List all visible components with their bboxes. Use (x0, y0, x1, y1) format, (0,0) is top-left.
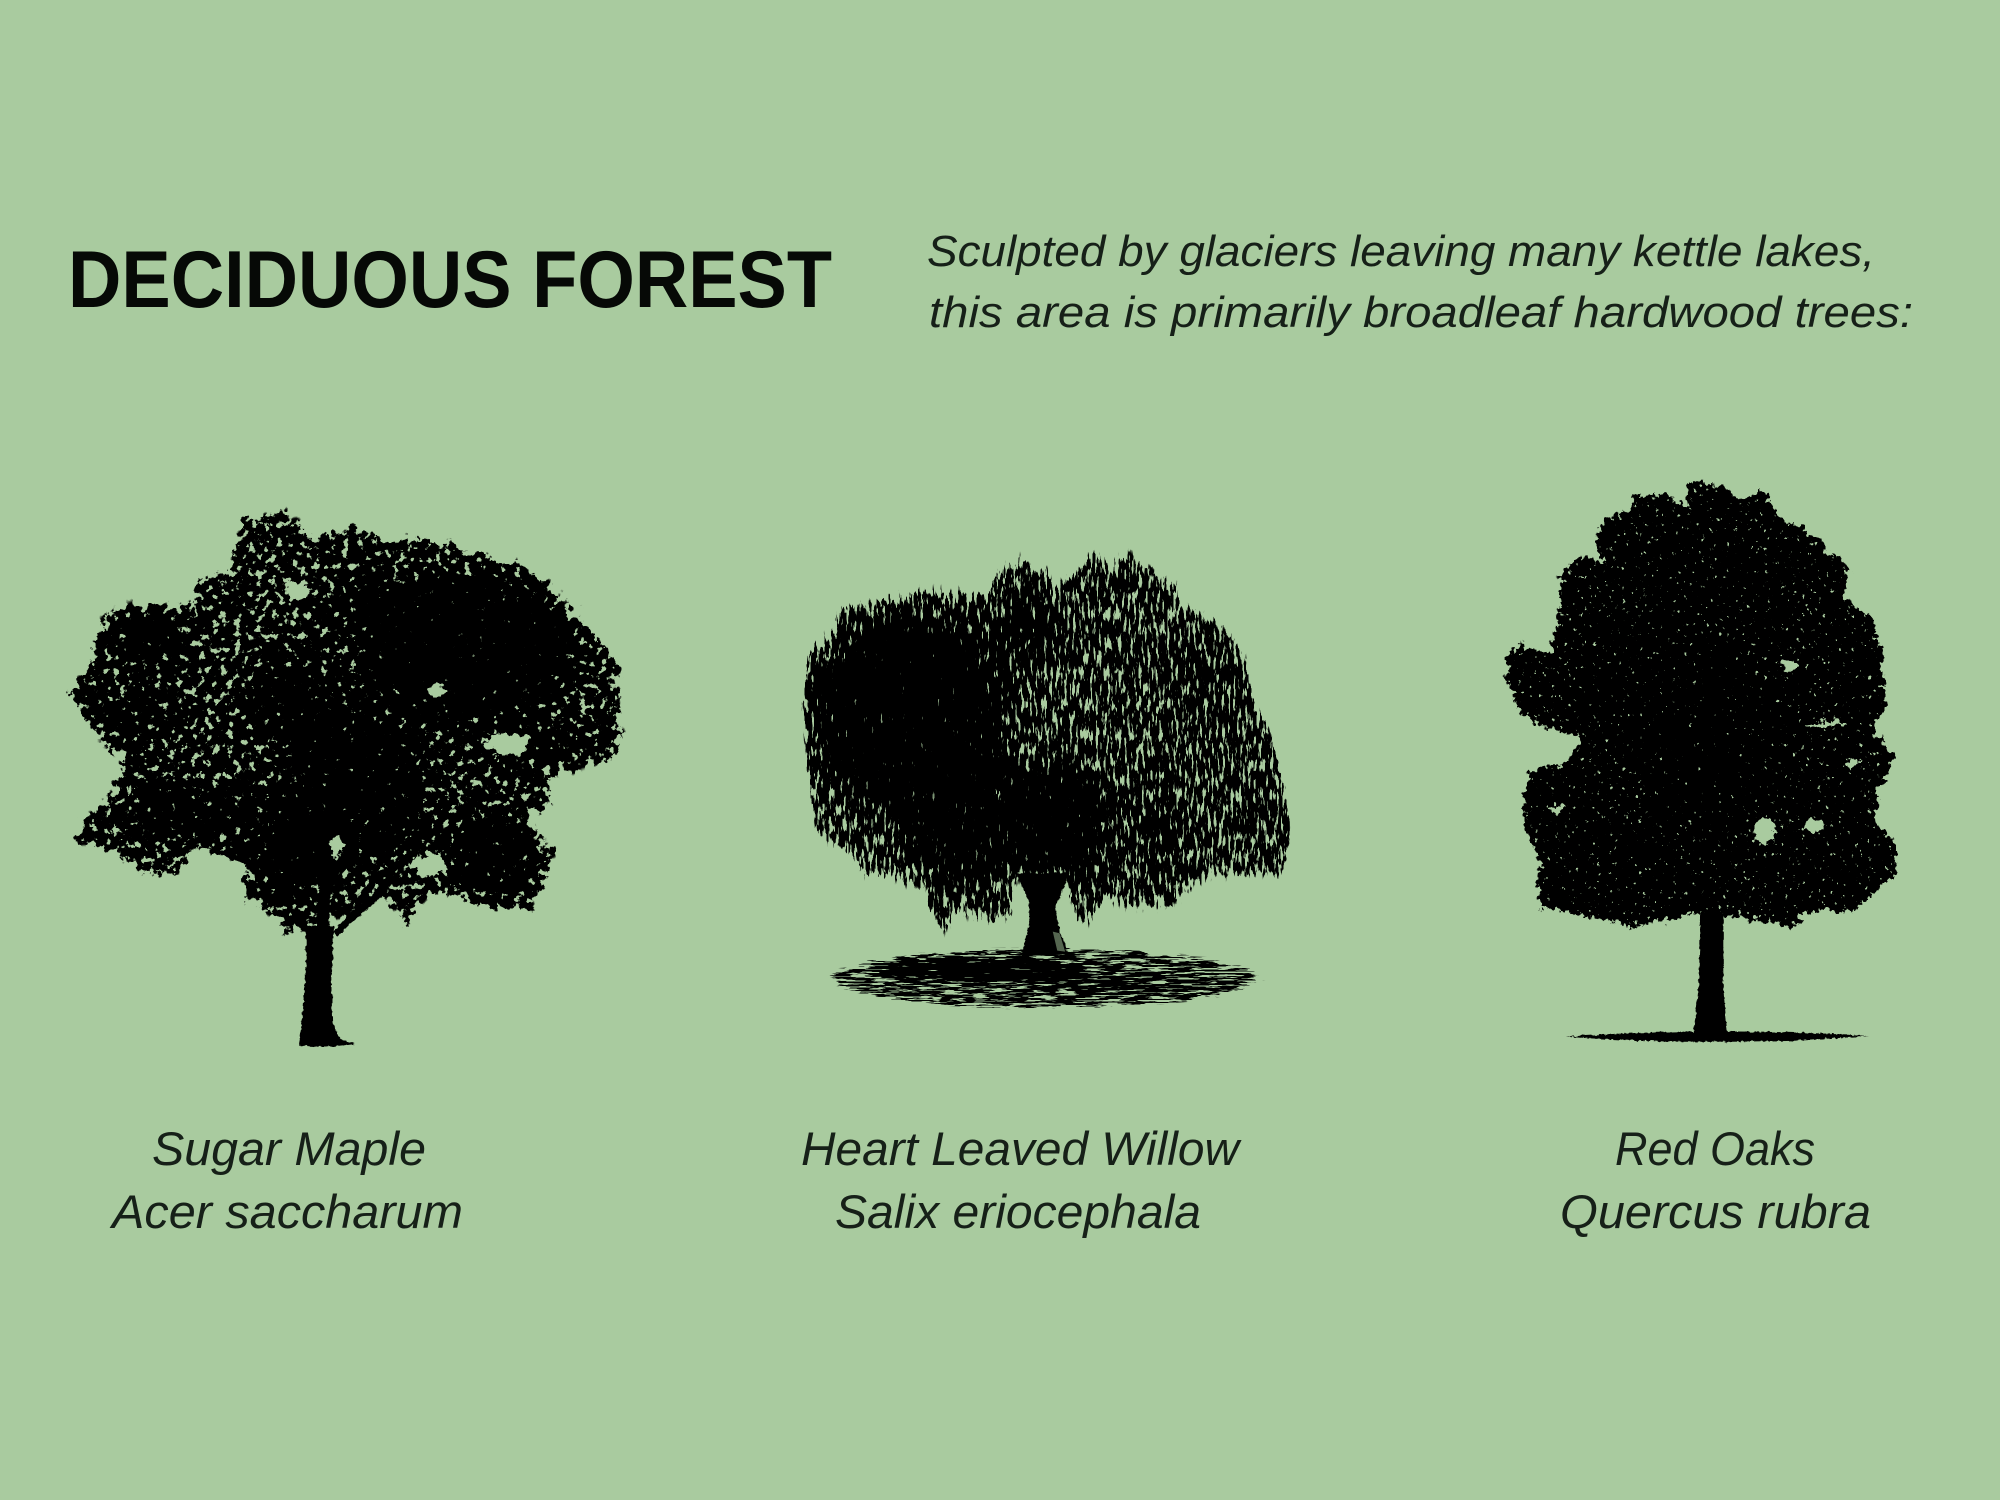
label: sugar maple: Sugar Maple (152, 1122, 426, 1175)
panel: heart leaved willow (801, 552, 1290, 1238)
intro text (927, 227, 1913, 337)
label: sugar maple: Acer saccharum (109, 1185, 463, 1238)
intro text: Sculpted by glaciers leaving many kettle lakes, (927, 227, 1875, 276)
icon: willow tree (804, 552, 1290, 1008)
label: heart leaved willow: Salix eriocephala (835, 1185, 1201, 1238)
label: heart leaved willow (801, 1122, 1242, 1238)
label: heart leaved willow: Heart Leaved Willow (801, 1122, 1242, 1175)
title: DECIDUOUS FOREST (68, 235, 832, 325)
label: red oaks: Quercus rubra (1560, 1185, 1871, 1238)
intro text: this area is primarily broadleaf hardwood trees: (929, 288, 1913, 337)
icon: red oak tree (1507, 483, 1897, 1042)
label: red oaks (1560, 1122, 1871, 1238)
icon: sugar maple tree (64, 511, 621, 1047)
trunk (1016, 873, 1069, 957)
label: sugar maple (109, 1122, 463, 1238)
panel: red oaks (1507, 483, 1897, 1238)
label: red oaks: Red Oaks (1615, 1122, 1815, 1175)
panel: sugar maple (64, 511, 621, 1238)
